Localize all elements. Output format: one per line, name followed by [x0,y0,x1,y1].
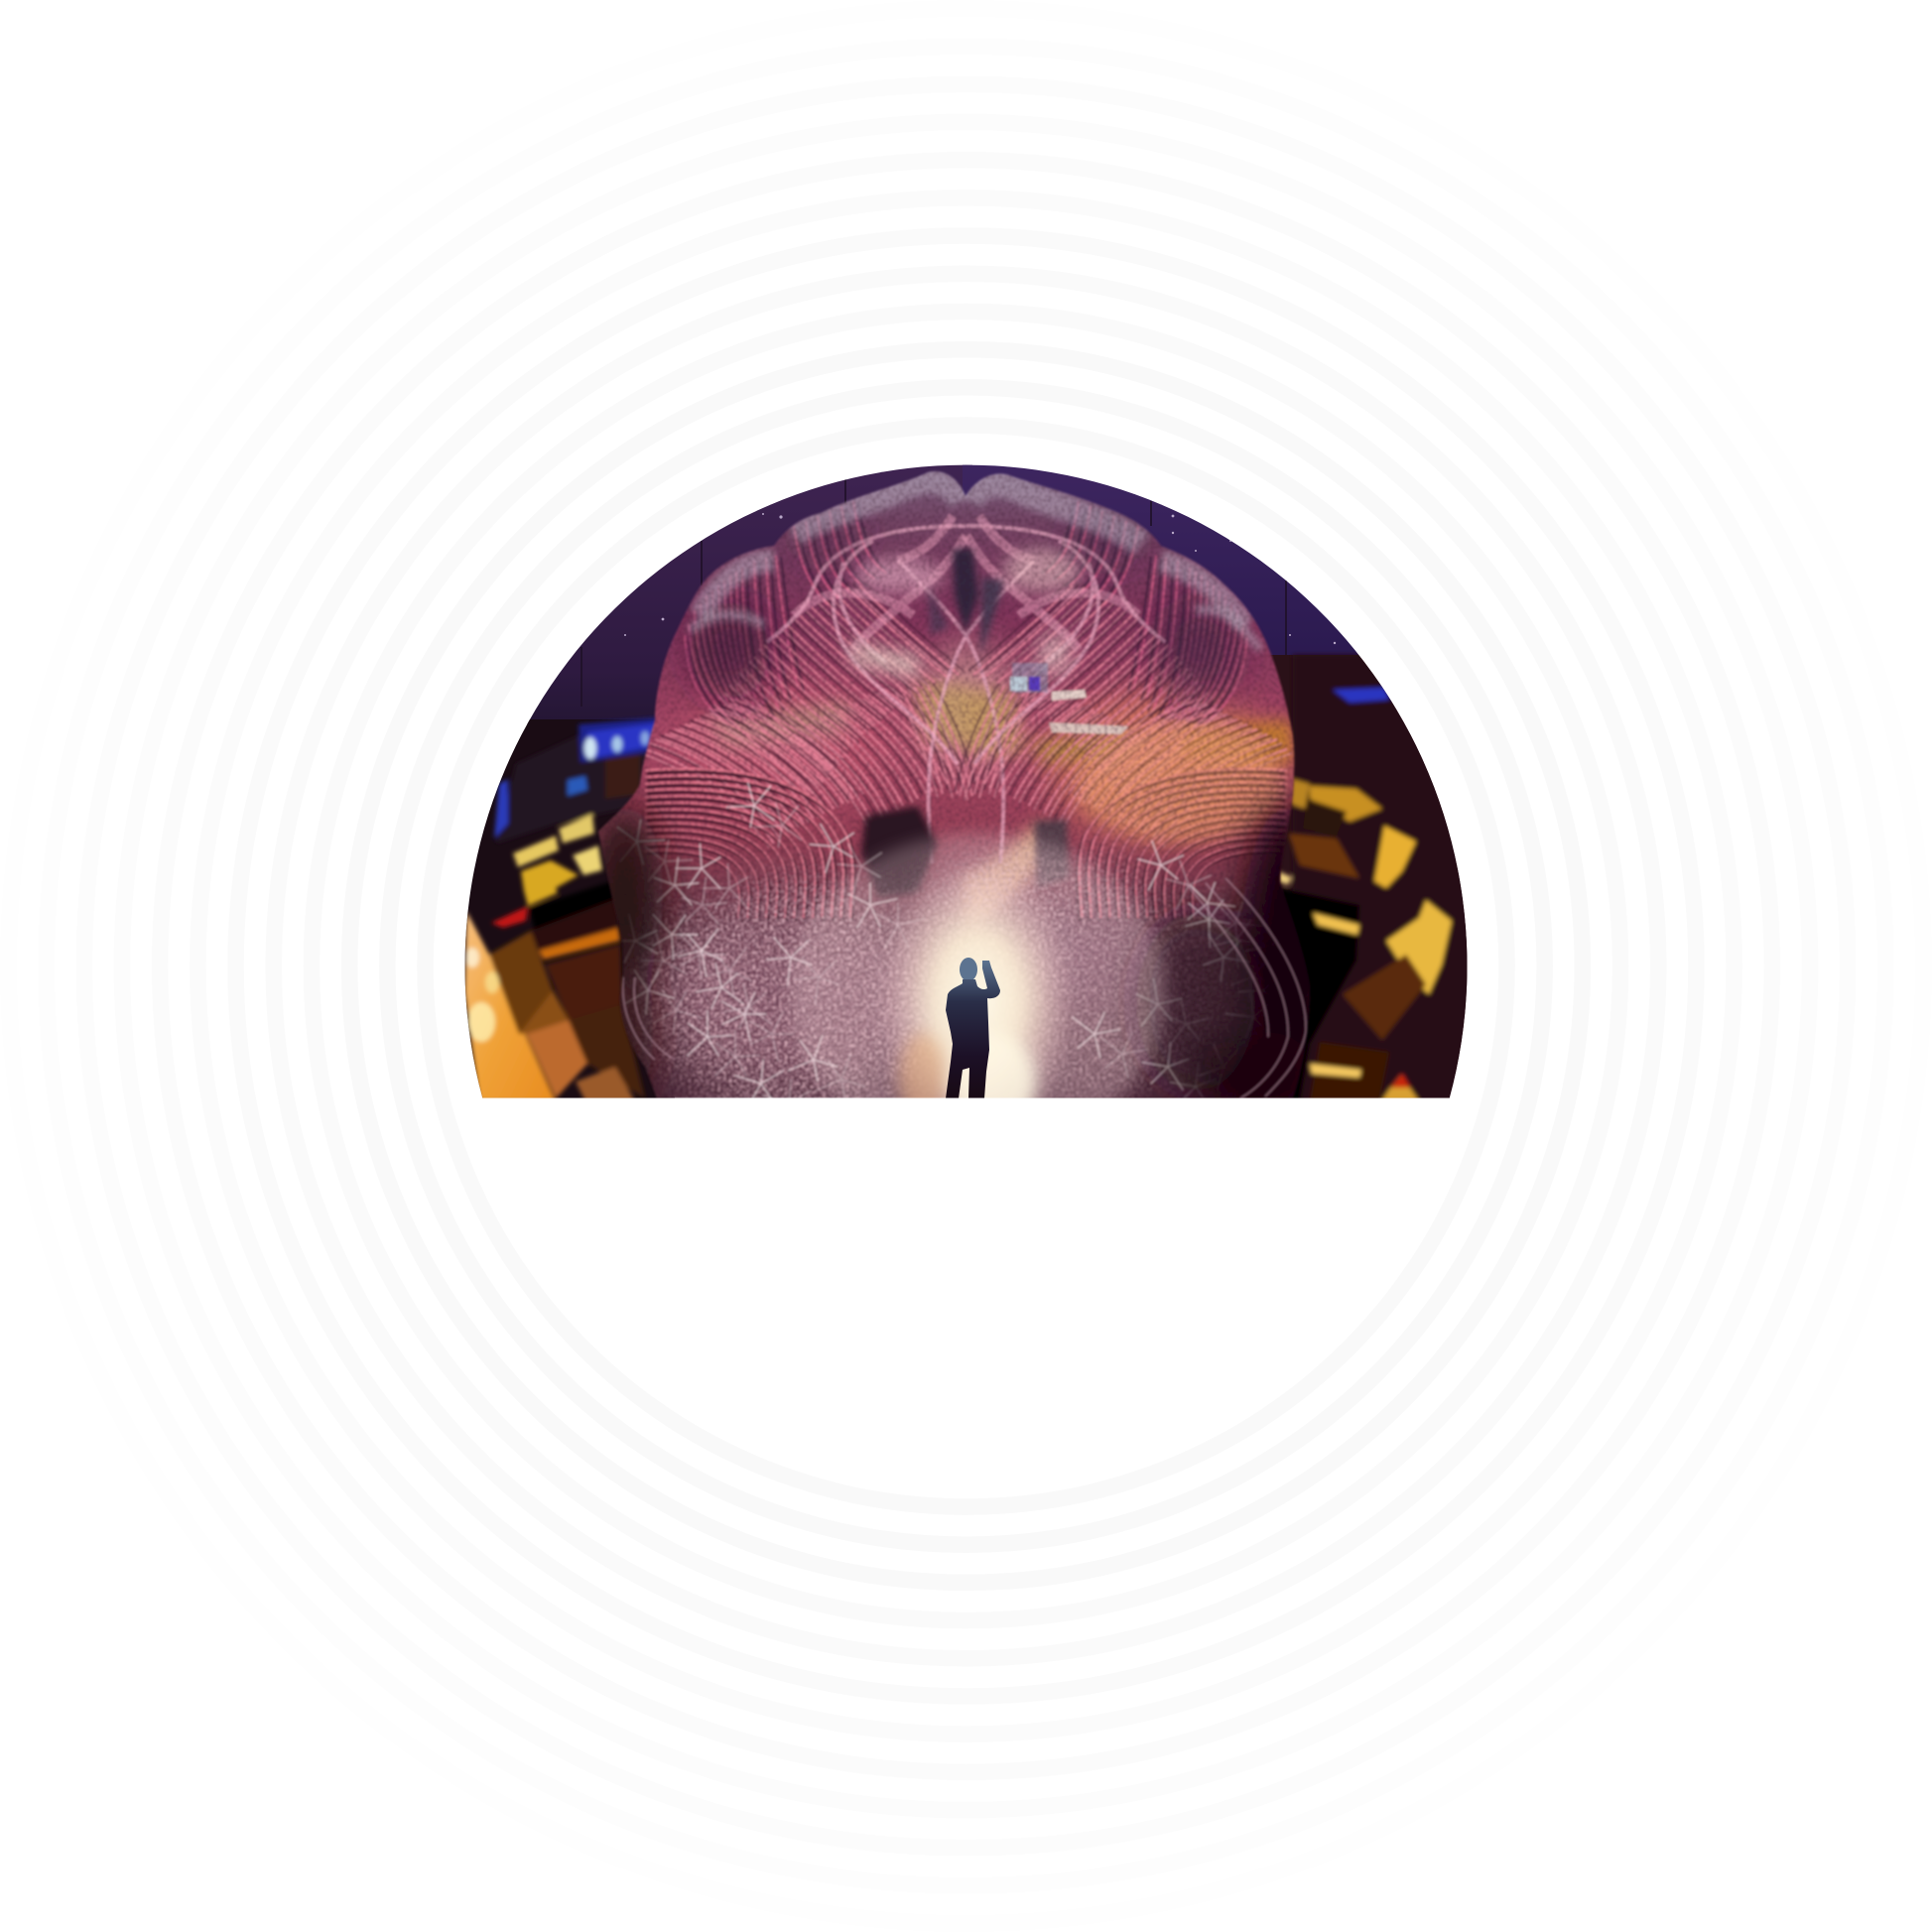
speckled neurons, lower brain [609,836,1307,1097]
blue reflection square [1010,663,1048,693]
photo: brain light sculpture in a half circle [464,464,1467,1097]
light and shadow of brain mass [670,645,1270,1077]
darkened lobe interiors [690,519,1238,700]
body with raised arm [946,961,1000,1098]
outer boundary strands [623,878,1306,1098]
brain body with softened edge [597,470,1310,1097]
bright streaks [1052,690,1087,701]
neuron stars [616,782,1310,1097]
head [960,958,977,981]
dark voids in brain [861,549,1070,898]
pale highlights over strands [846,549,1285,843]
gold and pale streaks [708,685,1293,933]
dark outer edges of brain [587,804,1340,1131]
nerve strands, right half mirrored [929,501,1292,921]
grey lobe ridges [690,481,1260,650]
person silhouette [946,958,1000,1098]
scene: night plaza behind sculpture [456,456,1479,1111]
pale streak lower [1049,722,1128,734]
central glow [784,828,1173,1097]
full infographic canvas [464,464,1467,1097]
fine speckle, whole brain [585,456,1320,1111]
nerve strands, left half [640,501,1003,921]
